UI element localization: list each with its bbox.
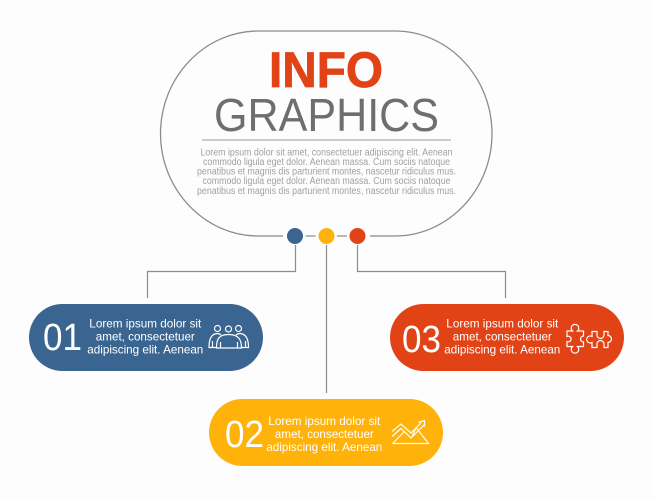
icon: mountain chart bbox=[392, 420, 428, 444]
number: 02: 02 bbox=[225, 414, 264, 456]
text: panel 01 description: Lorem ipsum dolor sit bbox=[89, 317, 202, 331]
text: panel 03 description: amet, consectetuer bbox=[453, 330, 552, 344]
panel: 03 bbox=[390, 304, 624, 371]
text: panel 02 description: adipiscing elit. Aenean bbox=[266, 440, 382, 454]
connector: blue dot to panel 01 bbox=[148, 245, 296, 298]
text: panel 02 description: Lorem ipsum dolor sit bbox=[268, 414, 381, 428]
text: panel 02 description bbox=[266, 414, 382, 454]
text: panel 01 description: adipiscing elit. Aenean bbox=[87, 343, 203, 357]
icon: people bbox=[209, 326, 248, 348]
dot: yellow bbox=[318, 228, 334, 244]
dot: blue bbox=[287, 228, 303, 244]
text block: intro paragraph: commodo ligula eget dolor. Aenean massa. Cum sociis natoque bbox=[203, 157, 450, 168]
text: panel 03 description: Lorem ipsum dolor sit bbox=[446, 317, 559, 331]
text: panel 01 description bbox=[87, 317, 203, 357]
title: INFO: INFO bbox=[269, 42, 383, 98]
text: panel 03 description: adipiscing elit. Aenean bbox=[444, 343, 560, 357]
text block: intro paragraph: penatibus et magnis dis parturient montes, nascetur ridiculus mus. bbox=[197, 166, 456, 178]
dot: red bbox=[350, 228, 366, 244]
connector: red dot to panel 03 bbox=[358, 245, 506, 298]
number: 01: 01 bbox=[43, 317, 82, 359]
panel: rounded header outline bbox=[160, 31, 492, 236]
text: panel 02 description: amet, consectetuer bbox=[275, 427, 374, 441]
icon: puzzle pieces bbox=[567, 324, 612, 353]
text: panel 03 description bbox=[444, 317, 560, 357]
panel: 01 bbox=[29, 304, 263, 371]
text block: intro paragraph: commodo ligula eget dolor. Aenean massa. Cum sociis natoque bbox=[202, 176, 451, 187]
text block: intro paragraph bbox=[197, 148, 456, 197]
text block: intro paragraph: Lorem ipsum dolor sit amet, consectetuer adipiscing elit. Aenean bbox=[200, 148, 452, 158]
panel: 02 bbox=[209, 399, 443, 466]
connector: yellow dot to panel 02 bbox=[326, 245, 328, 393]
title: GRAPHICS: GRAPHICS bbox=[214, 89, 439, 141]
number: 03: 03 bbox=[402, 319, 441, 361]
text: panel 01 description: amet, consectetuer bbox=[96, 330, 195, 344]
text block: intro paragraph: penatibus et magnis dis parturient montes, nascetur ridiculus mus. bbox=[197, 186, 456, 197]
